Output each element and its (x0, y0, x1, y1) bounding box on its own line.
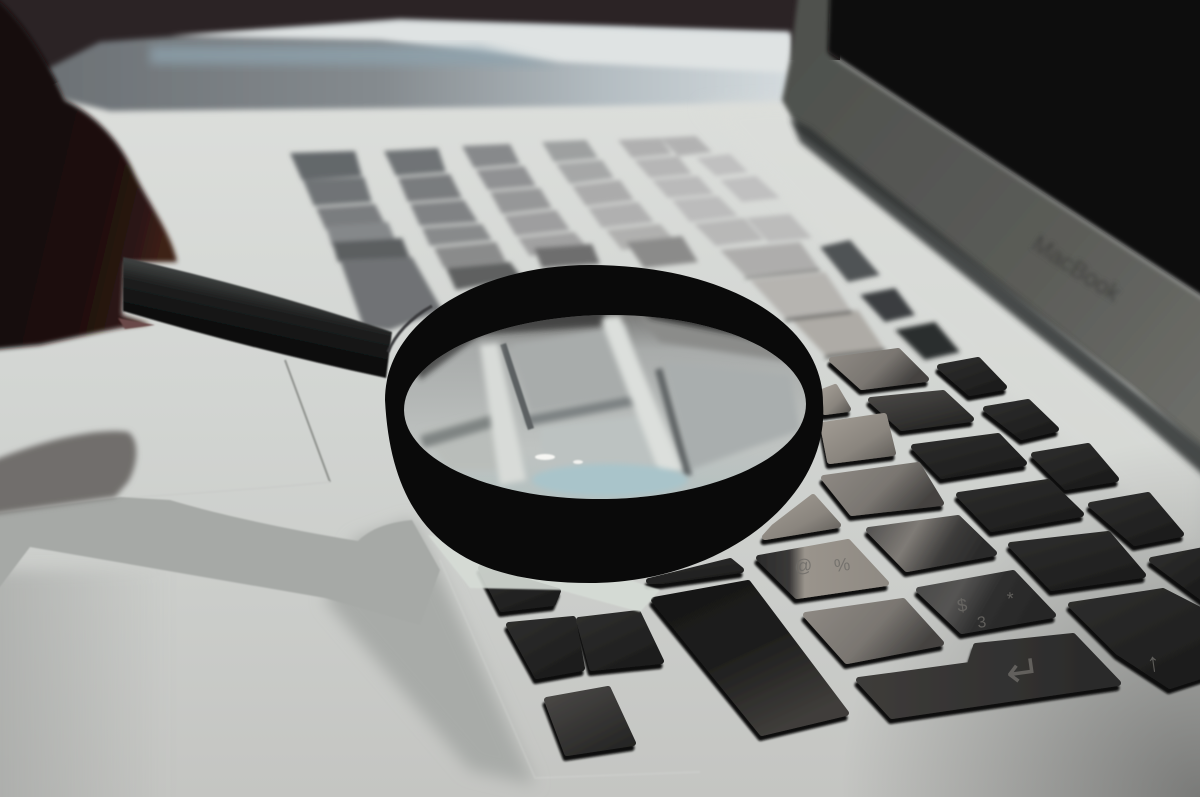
magnifying glass (123, 257, 823, 612)
outer wall (385, 265, 823, 583)
key legends: * (1006, 588, 1016, 609)
laptop screen (828, 0, 1200, 308)
glass base reflection (428, 535, 660, 612)
dark room background (0, 0, 840, 110)
bottom right deck shading (800, 420, 1200, 797)
key cluster lower left (481, 568, 846, 753)
key legends: ↵ (1003, 645, 1044, 697)
rim highlight (388, 306, 432, 352)
hand shadow on deck (0, 431, 136, 516)
trackpad edge (120, 360, 330, 498)
brand name on bezel: MacBook (1027, 230, 1126, 308)
key legends: % (833, 554, 851, 576)
blurred upper keys (290, 136, 885, 357)
distant dark keys, out of focus (820, 240, 960, 360)
deck light strip beside keyboard (700, 100, 1200, 560)
hand (0, 0, 177, 352)
key column right (940, 360, 1200, 599)
dark hinge line (790, 118, 1200, 490)
lens (404, 315, 806, 499)
palm rest left shading (0, 570, 170, 797)
handle (123, 257, 392, 378)
key legends: @ (793, 555, 814, 577)
key legends (793, 554, 1162, 697)
magnifier shadow on deck (0, 497, 535, 785)
laptop screen bezel (782, 0, 1200, 465)
key legends: ↑ (1145, 646, 1162, 678)
key column centre (649, 351, 1200, 716)
keyboard keys in focus (481, 351, 1200, 753)
key legends: 3 (976, 614, 987, 632)
key legends: $ (956, 595, 968, 616)
hinge band (45, 20, 795, 111)
keyboard well outline (440, 560, 700, 778)
